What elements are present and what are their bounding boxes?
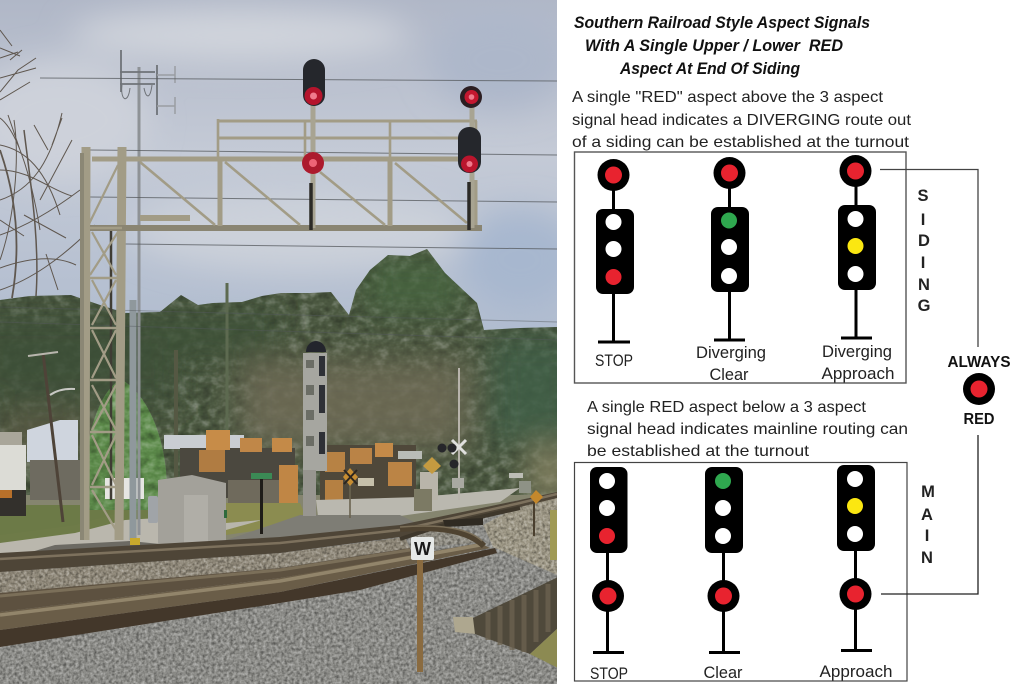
lower lamp, center mast [302, 152, 324, 174]
label: diverging clear [696, 344, 766, 384]
text block: main explanation: be established at the turnout [587, 443, 810, 460]
far signal tower [303, 341, 327, 516]
label: diverging approach: Approach [822, 365, 894, 383]
tree line [0, 249, 557, 495]
street sign [251, 473, 272, 534]
signal gantry structure [82, 105, 482, 540]
text block: main explanation: A single RED aspect below a 3 aspect [587, 399, 867, 416]
vertical label: main: M [921, 483, 935, 501]
bare tree branches [0, 30, 95, 298]
vertical label: main: N [921, 549, 933, 567]
text block: main explanation: signal head indicates mainline routing can [587, 421, 908, 438]
label: clear: Clear [704, 664, 743, 682]
upper lamp, right mast [460, 86, 482, 108]
text block: siding explanation: of a siding can be established at the turnout [572, 134, 910, 151]
label: stop: STOP [590, 665, 628, 683]
text block: siding explanation: A single "RED" aspect above the 3 aspect [572, 89, 884, 106]
vertical label: main [921, 483, 935, 567]
callout: always red: ALWAYS [948, 354, 1010, 371]
vertical label: siding: G [918, 297, 930, 315]
signal: stop [590, 467, 628, 652]
panel: siding signals [574, 152, 906, 384]
spool yard [164, 430, 422, 504]
lower rail track [0, 526, 497, 647]
connector: siding lamp to always red [880, 170, 978, 347]
label: diverging clear: Diverging [696, 344, 766, 362]
ground base behind yard [26, 495, 532, 540]
mast base [130, 538, 140, 545]
vertical label: siding: I [921, 211, 925, 229]
business sign [105, 478, 144, 499]
overhead wires [0, 78, 557, 340]
ballast and retaining wall [0, 492, 558, 684]
text block: siding explanation [572, 89, 912, 151]
road and path surfaces [0, 488, 519, 553]
vertical label: siding: N [918, 276, 930, 294]
title: With A Single Upper / Lower RED [585, 37, 843, 55]
upper head, center mast [303, 59, 325, 106]
photo: signal gantry and railway siding [0, 0, 580, 684]
text block: main explanation [587, 399, 908, 460]
label: diverging approach [822, 343, 894, 383]
text block: siding explanation: signal head indicates a DIVERGING route out [572, 112, 912, 129]
W whistle post: W [414, 539, 431, 559]
vertical label: siding: S [917, 187, 929, 205]
callout: always red [948, 354, 1010, 428]
vertical label: siding: I [921, 254, 925, 272]
relay shed [158, 475, 227, 544]
lower head, right mast [458, 127, 481, 173]
title [574, 14, 870, 78]
lit signal heads on gantry [302, 59, 482, 174]
connector: main lamp to always red [881, 435, 978, 594]
W whistle post [411, 537, 434, 672]
title: Aspect At End Of Siding [619, 60, 800, 78]
label: stop: STOP [595, 352, 633, 370]
buildings and trailer, left [0, 420, 128, 535]
title: Southern Railroad Style Aspect Signals [574, 14, 870, 32]
vertical label: siding [917, 187, 930, 315]
green tree behind mast [84, 380, 167, 510]
orange sign at right [530, 490, 543, 536]
label: diverging clear: Clear [710, 366, 749, 384]
callout: always red: RED [964, 411, 994, 428]
vertical label: siding: D [918, 232, 930, 250]
vertical label: main: A [921, 506, 933, 524]
road signs and crossing signal [343, 368, 531, 518]
label: diverging approach: Diverging [822, 343, 892, 361]
signal: clear [705, 467, 743, 652]
label: approach: Approach [820, 663, 892, 681]
vertical label: main: I [925, 527, 929, 545]
panel: main signals [574, 462, 907, 683]
signal: approach [837, 465, 875, 650]
signal: diverging approach [838, 155, 876, 338]
upper rail track [0, 492, 557, 572]
car [148, 496, 158, 523]
signal: stop [596, 159, 634, 342]
signal: diverging clear [711, 157, 749, 340]
utility poles [28, 283, 227, 522]
antenna mast and light pole [120, 50, 175, 540]
